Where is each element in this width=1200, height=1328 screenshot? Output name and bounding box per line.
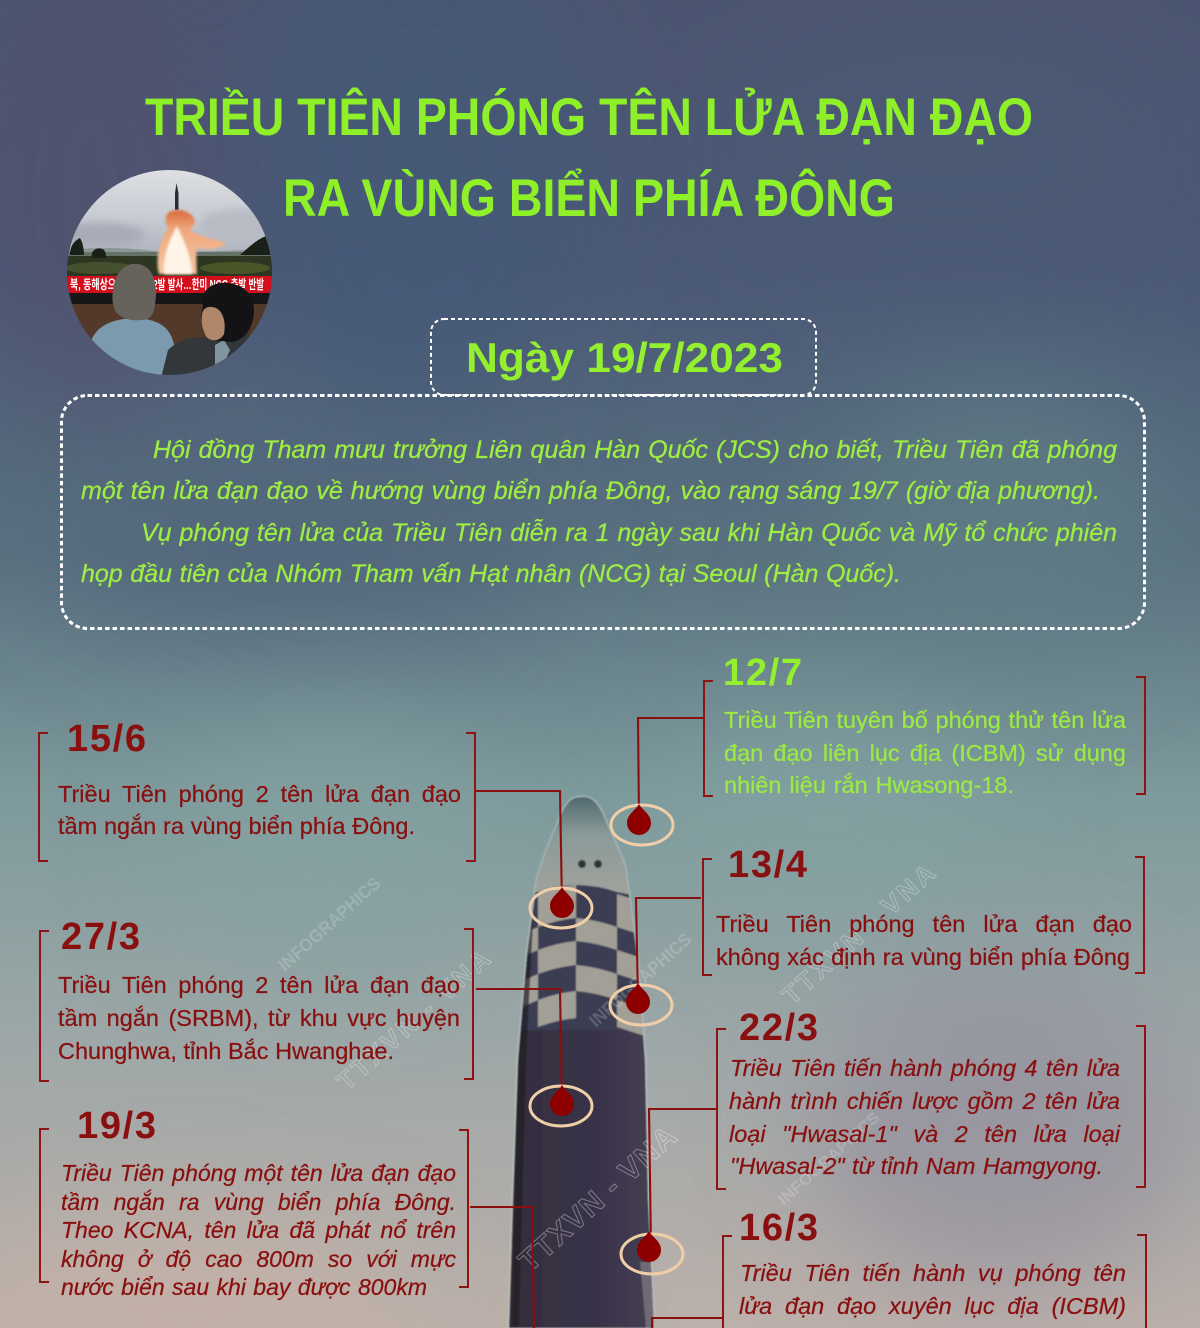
date box xyxy=(431,319,816,395)
panel: intro summary: Hội đồng Tham mưu trưởng Liên quân Hàn Quốc (JCS) cho biết, Triều Tiên đã phóng xyxy=(153,436,1117,464)
marker: 13/4 xyxy=(610,983,672,1025)
panel: 27/3: Chunghwa, tỉnh Bắc Hwanghae. xyxy=(58,1038,394,1064)
marker: 22/3 xyxy=(621,1231,683,1274)
panel: 22/3 xyxy=(716,1007,1146,1190)
watermarks: TTXVN - VNA xyxy=(331,944,496,1096)
panel: 22/3: hành trình chiến lược gồm 2 tên lửa xyxy=(729,1088,1120,1114)
panel: 12/7: đạn đạo liên lục địa (ICBM) sử dụng xyxy=(724,740,1126,766)
rocket xyxy=(508,795,656,1328)
panel: 12/7: 12/7 xyxy=(723,652,804,694)
panel: 19/3: không ở độ cao 800m so với mực xyxy=(61,1246,456,1272)
panel: 15/6: Triều Tiên phóng 2 tên lửa đạn đạo xyxy=(58,781,461,807)
panel: 22/3: "Hwasal-2" từ tỉnh Nam Hamgyong. xyxy=(730,1153,1103,1179)
panel: 19/3: tầm ngắn ra vùng biển phía Đông. xyxy=(61,1189,456,1215)
panel: 19/3 xyxy=(39,1105,469,1300)
panel: intro summary xyxy=(60,394,1146,630)
panel: 13/4: 13/4 xyxy=(728,844,809,886)
banner text xyxy=(70,278,264,291)
panel: 19/3: Theo KCNA, tên lửa đã phát nổ trên xyxy=(61,1217,456,1243)
panel: 13/4: Triều Tiên phóng tên lửa đạn đạo xyxy=(716,911,1132,937)
panel: intro summary: Vụ phóng tên lửa của Triều Tiên diễn ra 1 ngày sau khi Hàn Quốc và Mỹ tổ chức phiên xyxy=(141,519,1117,547)
panel: 15/6: tầm ngắn ra vùng biển phía Đông. xyxy=(58,813,415,839)
title xyxy=(145,86,1033,228)
watermarks xyxy=(274,858,941,1278)
person: right viewer xyxy=(161,283,254,378)
panel: 19/3: Triều Tiên phóng một tên lửa đạn đạo xyxy=(61,1160,456,1186)
watermarks: INFOGRAPHICS xyxy=(775,1109,884,1209)
date box: Ngày 19/7/2023 xyxy=(466,334,783,381)
panel: 15/6: 15/6 xyxy=(67,718,148,760)
panel: 12/7 xyxy=(703,652,1146,798)
banner text: 북, 동해상으 xyxy=(70,277,116,292)
panel: 15/6 xyxy=(38,718,476,862)
watermarks: INFOGRAPHICS xyxy=(585,929,695,1031)
panel: 13/4: không xác định ra vùng biển phía Đông xyxy=(716,944,1130,970)
title: TRIỀU TIÊN PHÓNG TÊN LỬA ĐẠN ĐẠO xyxy=(145,86,1033,147)
panel: 16/3: 16/3 xyxy=(739,1207,820,1249)
banner text: 2발 발사…한미 NCG 측발 반발 xyxy=(153,277,264,292)
marker: 12/7 xyxy=(611,804,673,845)
panel: 19/3: nước biển sau khi bay được 800km xyxy=(61,1274,427,1300)
panel: 12/7: nhiên liệu rắn Hwasong-18. xyxy=(724,772,1014,798)
connector lines xyxy=(470,718,722,1328)
panel: 22/3: 22/3 xyxy=(739,1007,820,1049)
panel: 27/3: 27/3 xyxy=(61,916,142,958)
watermarks: TTXVN - VNA xyxy=(776,858,941,1010)
marker: 27/3 xyxy=(530,1085,592,1126)
panel: 27/3 xyxy=(39,916,474,1082)
panel: 27/3: tầm ngắn (SRBM), từ khu vực huyện xyxy=(58,1005,460,1031)
person: left viewer xyxy=(90,264,176,380)
panel: 22/3: loại "Hwasal-1" và 2 tên lửa loại xyxy=(729,1121,1120,1147)
panel: intro summary: họp đầu tiên của Nhóm Tham vấn Hạt nhân (NCG) tại Seoul (Hàn Quốc). xyxy=(81,560,901,588)
panel: 16/3: Triều Tiên tiến hành vụ phóng tên xyxy=(740,1260,1126,1286)
panel: 27/3: Triều Tiên phóng 2 tên lửa đạn đạo xyxy=(58,972,460,998)
photo: people watching missile launch on TV xyxy=(67,170,272,375)
panel: 13/4 xyxy=(702,844,1145,976)
panel: 16/3 xyxy=(722,1207,1147,1328)
panel: 12/7: Triều Tiên tuyên bố phóng thử tên lửa xyxy=(724,707,1126,733)
title: RA VÙNG BIỂN PHÍA ĐÔNG xyxy=(283,167,895,228)
panel: 16/3: lửa đạn đạo xuyên lục địa (ICBM) xyxy=(739,1293,1126,1319)
marker: 15/6 xyxy=(530,887,592,928)
panel: 19/3: 19/3 xyxy=(77,1105,158,1147)
watermarks: TTXVN - VNA xyxy=(513,1120,683,1278)
watermarks: INFOGRAPHICS xyxy=(274,873,384,975)
panel: 22/3: Triều Tiên tiến hành phóng 4 tên lửa xyxy=(730,1055,1120,1081)
panel: intro summary: một tên lửa đạn đạo về hướng vùng biển phía Đông, vào rạng sáng 19/7 (giờ địa phương). xyxy=(81,477,1100,505)
missile and plume xyxy=(157,183,226,274)
